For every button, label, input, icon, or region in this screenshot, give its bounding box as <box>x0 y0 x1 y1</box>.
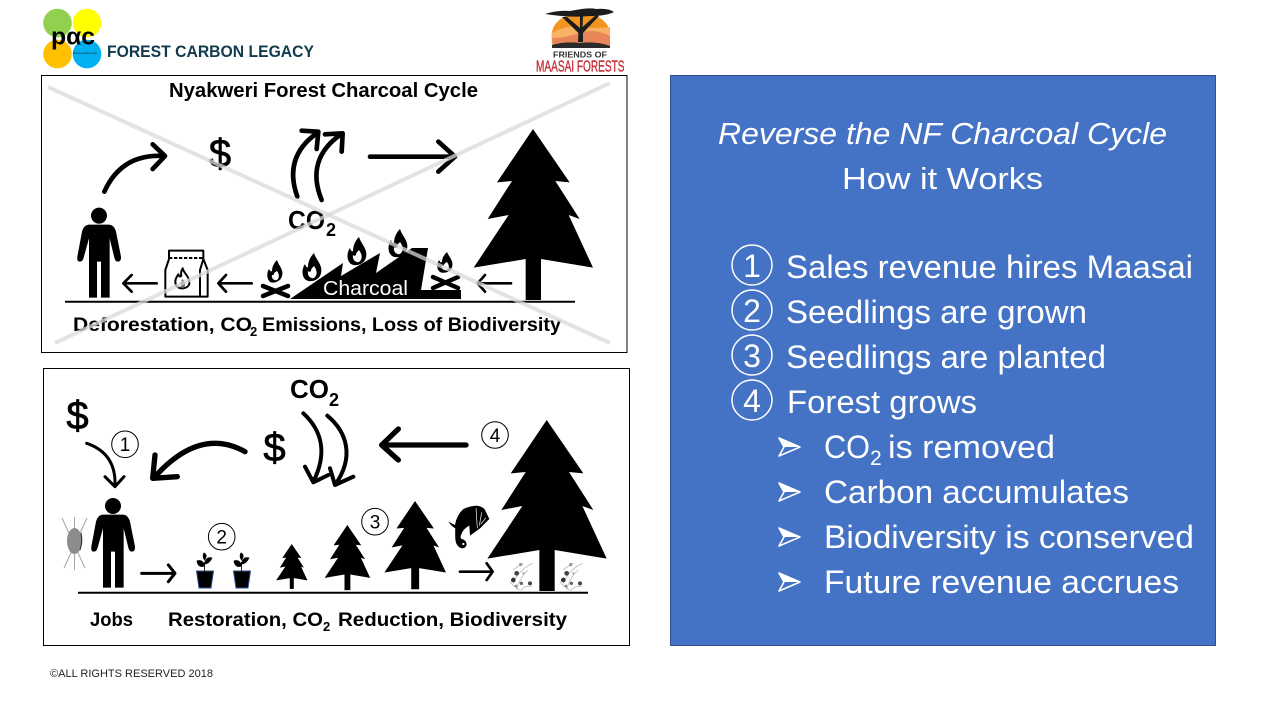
label: co2: 2 <box>326 220 336 240</box>
icon: mature tree <box>474 129 593 300</box>
caption: restoration: 2 <box>323 619 330 634</box>
panel: nyakweri forest charcoal cycle <box>42 76 627 352</box>
logo: pac forest carbon legacy: pαc <box>51 24 95 50</box>
caption: deforestation: Emissions, Loss of Biodiversity <box>262 315 561 336</box>
caption: deforestation: Deforestation, CO <box>73 315 252 336</box>
label: co2 <box>288 205 336 240</box>
heading: charcoal cycle: Nyakweri Forest Charcoal Cycle <box>169 80 478 102</box>
caption: restoration <box>168 610 567 634</box>
logo: friends of maasai forests <box>536 8 624 75</box>
arrow: money to jobs <box>153 443 245 478</box>
bullet: future revenue: Future revenue accrues <box>824 564 1179 600</box>
icon: charcoal kiln with flames <box>290 229 461 300</box>
logo: friends of maasai forests: MAASAI FORESTS <box>536 58 624 76</box>
icon: medium tree <box>325 525 370 590</box>
icon: campfire right <box>433 252 458 288</box>
step 1: 1 <box>743 248 761 284</box>
arrow: bag to person <box>123 275 157 292</box>
bullet: co2 removed: CO <box>824 429 870 465</box>
label: charcoal: Charcoal <box>323 278 408 300</box>
step 2: 2 <box>743 293 761 329</box>
icon: seedling pots <box>196 553 250 588</box>
arrow: dollar to person <box>87 443 124 487</box>
caption: deforestation <box>73 315 561 339</box>
icon: dollar left: $ <box>66 394 89 438</box>
step 4: 4 <box>743 383 761 419</box>
subheading: how it works: How it Works <box>842 161 1043 196</box>
caption: jobs: Jobs <box>90 610 133 631</box>
step 4 marker: 4 <box>490 426 501 447</box>
step 2 marker <box>208 523 235 550</box>
step 3: 3 <box>743 338 761 374</box>
icon: person <box>91 498 135 588</box>
icon: person <box>77 208 121 298</box>
icon: maasai shield and spears <box>62 517 87 570</box>
label: co2: CO <box>290 374 329 404</box>
icon: mature tree <box>487 420 607 591</box>
panel: reversed cycle <box>44 368 630 646</box>
heading: reverse the cycle: Reverse the NF Charcoal Cycle <box>718 116 1167 151</box>
arrows: co2 absorbed <box>303 413 353 485</box>
bullet: carbon accumulates: Carbon accumulates <box>824 474 1129 510</box>
caption: restoration: Restoration, CO <box>168 610 323 631</box>
logo: pac forest carbon legacy: FOREST CARBON LEGACY <box>107 43 314 61</box>
step 3 marker <box>362 508 388 535</box>
icon: charcoal bag <box>165 251 208 297</box>
step 2: Seedlings are grown <box>786 294 1087 330</box>
ground line <box>78 592 588 594</box>
bullet: co2 removed: 2 <box>870 447 882 470</box>
arrow: money to tree <box>370 142 455 172</box>
step 1 marker <box>112 431 138 458</box>
icon: elephant <box>448 506 489 548</box>
arrow: tree to money <box>382 429 466 460</box>
cross-out: gray x <box>48 83 610 343</box>
bullet: co2 removed: is removed <box>888 429 1055 465</box>
step 4: Forest grows <box>787 384 977 420</box>
bullet: co2 removed <box>779 429 1055 470</box>
step 1 marker: 1 <box>120 435 130 456</box>
caption: deforestation: 2 <box>250 324 257 339</box>
arrow: tree to fire <box>478 275 511 292</box>
icon: large tree <box>384 501 446 589</box>
arrow: person to money <box>104 144 165 192</box>
step 4 <box>732 380 977 420</box>
logo: pac forest carbon legacy: Planet Alpha Corp. <box>73 51 98 55</box>
step 3: Seedlings are planted <box>786 339 1106 375</box>
icon: dollar centre: $ <box>263 426 286 470</box>
step 1: Sales revenue hires Maasai <box>786 249 1193 285</box>
arrow: to mature forest <box>460 563 493 580</box>
label: co2: 2 <box>329 390 339 410</box>
copyright: ©ALL RIGHTS RESERVED 2018 <box>50 668 213 680</box>
arrow: person to seedlings <box>142 565 175 582</box>
bullet: biodiversity conserved: Biodiversity is conserved <box>824 519 1194 555</box>
icon: small tree <box>276 544 307 589</box>
label: co2 <box>290 374 339 410</box>
step 2 marker: 2 <box>216 528 227 548</box>
label: co2: CO <box>288 205 325 235</box>
arrow: fire to bag <box>218 275 252 292</box>
caption: restoration: Reduction, Biodiversity <box>338 610 567 631</box>
icon: dollar sign: $ <box>209 132 231 176</box>
arrows: co2 rising <box>293 131 343 200</box>
logo: pac forest carbon legacy <box>43 9 314 68</box>
step 4 marker <box>482 422 508 448</box>
icon: campfire left <box>263 260 288 296</box>
ground line <box>65 301 575 303</box>
logo: friends of maasai forests: FRIENDS OF <box>553 50 607 60</box>
step 3 marker: 3 <box>370 512 380 534</box>
panel: how it works <box>670 76 1216 646</box>
icon: flowers <box>510 563 583 591</box>
